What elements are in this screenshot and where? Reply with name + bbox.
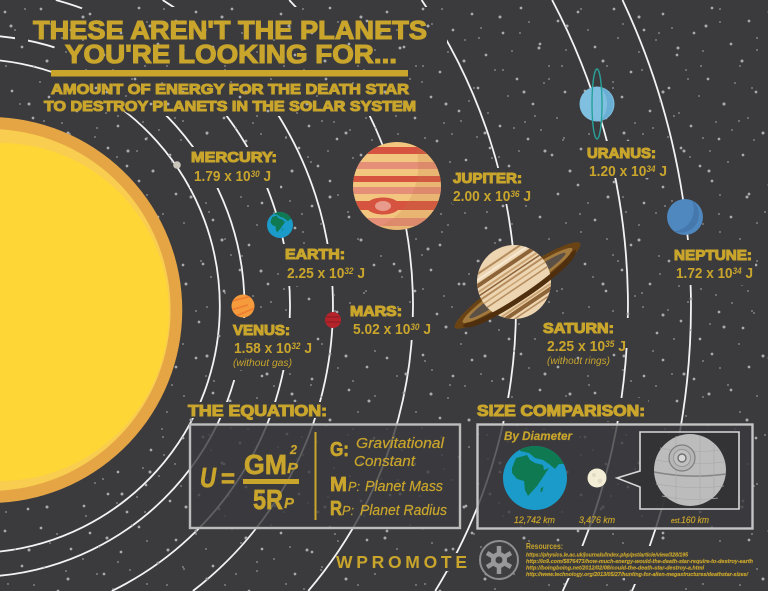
planet: mars xyxy=(325,312,341,328)
resources: http://io9.com/5876473/how-much-energy-would-the-death-star-require-to-destroy-earth xyxy=(526,559,754,565)
icon: imperial crest xyxy=(480,541,518,579)
resources: https://physics.le.ac.uk/journals/index.php/pst/article/view/328/195 xyxy=(526,552,689,558)
earth diameter: 12,742 km xyxy=(514,515,555,526)
logo: wpromote: WPROMOTE xyxy=(336,552,467,572)
planet: venus xyxy=(231,294,255,318)
label: mars: MARS: xyxy=(350,303,402,320)
variable definitions: Constant xyxy=(354,454,416,470)
label: saturn: 2.25 x 10 xyxy=(547,338,610,355)
label: mars: J xyxy=(420,321,431,338)
label: mars xyxy=(350,303,431,338)
planet: jupiter xyxy=(350,142,445,230)
death star diameter: est.160 km xyxy=(671,515,709,526)
label: jupiter xyxy=(453,170,531,205)
label: neptune: 1.72 x 10 xyxy=(676,265,739,282)
variable definitions xyxy=(330,436,447,520)
heading: size comparison: SIZE COMPARISON: xyxy=(477,403,645,420)
variable definitions: Planet Mass xyxy=(365,479,443,495)
label: mercury: 1.79 x 10 xyxy=(194,168,257,185)
label: uranus: J xyxy=(656,163,667,180)
label: saturn: SATURN: xyxy=(543,320,614,337)
label: venus: (without gas) xyxy=(233,358,292,369)
planet: mercury xyxy=(173,161,181,169)
label: venus: 32 xyxy=(291,341,301,351)
label: mercury: 30 xyxy=(251,169,260,179)
label: earth: J xyxy=(354,265,365,282)
variable definitions: M xyxy=(330,474,347,496)
label: mars: 30 xyxy=(410,322,420,332)
title rule xyxy=(51,70,408,76)
variable definitions: R xyxy=(330,498,342,520)
heading: the equation: THE EQUATION: xyxy=(188,403,327,420)
label: neptune: J xyxy=(742,265,753,282)
planet: uranus xyxy=(580,69,614,139)
label: earth: 32 xyxy=(344,266,354,276)
label: venus: J xyxy=(301,340,312,357)
formula: P xyxy=(287,460,299,477)
label: neptune: NEPTUNE: xyxy=(674,247,752,264)
formula: 5R xyxy=(253,484,283,515)
sun xyxy=(0,117,182,503)
planet: earth xyxy=(267,212,293,238)
orbit gaps behind labels xyxy=(187,141,755,584)
label: jupiter: 36 xyxy=(510,189,520,199)
label: earth: 2.25 x 10 xyxy=(287,265,350,282)
planet: saturn xyxy=(454,242,580,329)
formula xyxy=(200,442,299,515)
label: uranus: 1.20 x 10 xyxy=(589,163,652,180)
resources xyxy=(526,541,754,578)
formula: P xyxy=(284,495,295,512)
title: THESE AREN'T THE PLANETS xyxy=(33,17,427,45)
variable definitions: Planet Radius xyxy=(360,503,447,519)
panel: equation xyxy=(190,424,460,528)
label: uranus xyxy=(587,145,667,180)
formula: 2 xyxy=(289,442,298,457)
label: uranus: 34 xyxy=(646,164,656,174)
variable definitions: P: xyxy=(342,503,354,518)
variable definitions: P: xyxy=(348,479,360,494)
formula: GM xyxy=(244,449,287,480)
subtitle xyxy=(44,81,416,115)
label: venus: 1.58 x 10 xyxy=(234,340,297,357)
planet: neptune xyxy=(667,199,703,235)
variable definitions: G: xyxy=(330,439,349,461)
label: neptune: 34 xyxy=(733,266,742,276)
label: jupiter: JUPITER: xyxy=(453,170,522,187)
label: saturn: 35 xyxy=(605,339,615,349)
subtitle: TO DESTROY PLANETS IN THE SOLAR SYSTEM xyxy=(44,98,416,115)
label: saturn: J xyxy=(614,338,626,355)
label: mercury: J xyxy=(260,168,271,185)
moon diameter: 3,476 km xyxy=(579,515,615,526)
panel: size comparison xyxy=(478,424,752,528)
label: saturn: (without rings) xyxy=(547,356,610,367)
resources: Resources: xyxy=(526,541,563,551)
formula: U xyxy=(200,462,217,493)
label: neptune xyxy=(674,247,753,282)
variable definitions: Gravitational xyxy=(356,436,445,452)
title xyxy=(33,17,427,69)
label: saturn xyxy=(543,320,626,367)
label: jupiter: 2.00 x 10 xyxy=(453,188,516,205)
resources: http://boingboing.net/2012/02/08/could-the-death-star-destroy-a.html xyxy=(526,566,704,572)
zoom callout xyxy=(617,432,739,509)
icon: death star xyxy=(654,434,726,506)
label: jupiter: J xyxy=(520,188,531,205)
resources: http://www.technology.org/2013/05/27/hunting-for-alien-megastructures/deathstar-sizes/ xyxy=(526,572,749,578)
label: venus xyxy=(233,322,312,369)
label: mars: 5.02 x 10 xyxy=(353,321,416,338)
label: mercury xyxy=(191,149,277,185)
icon: moon xyxy=(588,468,606,488)
formula: = xyxy=(221,463,235,493)
label: mercury: MERCURY: xyxy=(191,149,277,166)
label: venus: VENUS: xyxy=(233,322,290,339)
by diameter heading: By Diameter xyxy=(504,431,573,443)
title: YOU'RE LOOKING FOR... xyxy=(65,41,397,69)
label: earth xyxy=(285,246,365,282)
icon: earth xyxy=(503,446,567,510)
label: uranus: URANUS: xyxy=(587,145,656,162)
subtitle: AMOUNT OF ENERGY FOR THE DEATH STAR xyxy=(51,81,409,98)
label: earth: EARTH: xyxy=(285,246,345,263)
